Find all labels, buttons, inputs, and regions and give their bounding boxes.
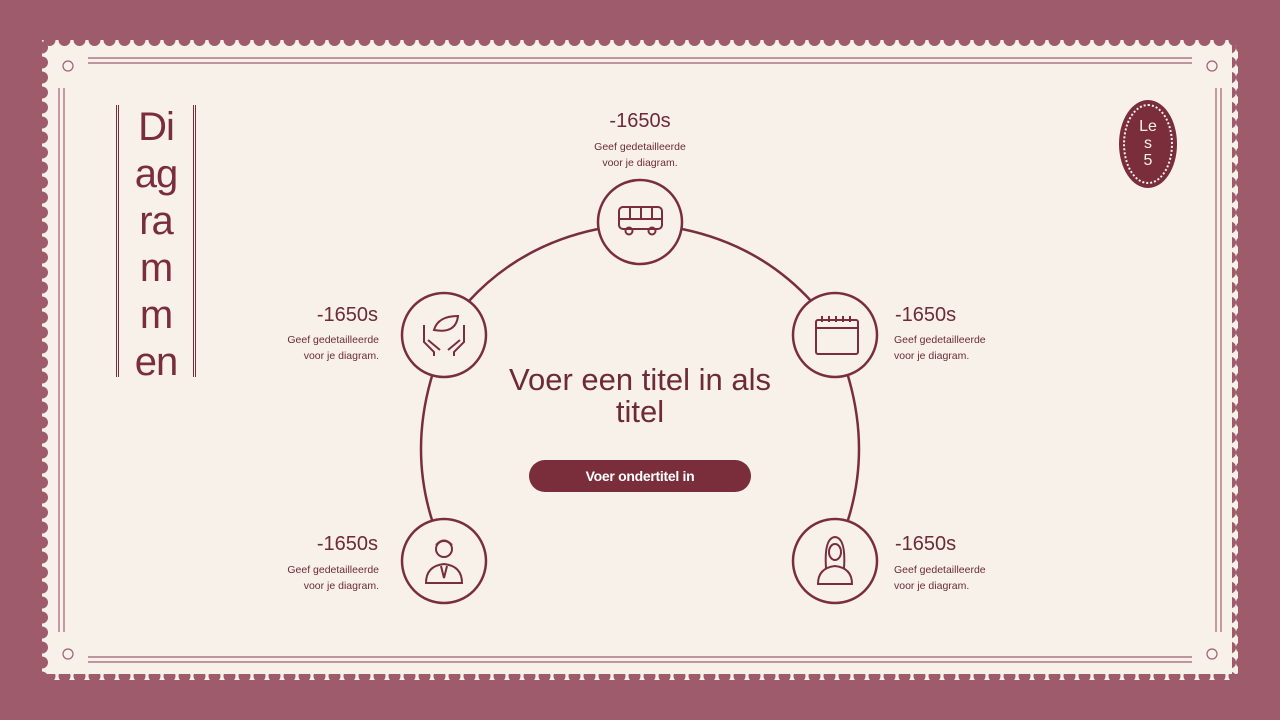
title: Diagrammen vertical <box>116 105 196 377</box>
text: voor je diagram. <box>304 580 379 592</box>
title: Diagrammen vertical: en <box>135 340 177 384</box>
text: top item: -1650s <box>609 110 671 132</box>
text: voor je diagram. <box>304 350 379 362</box>
main title: Voer een titel in als titel <box>509 362 771 429</box>
text: Geef gedetailleerde <box>287 334 379 346</box>
title: Diagrammen vertical: ra <box>139 199 173 243</box>
badge: Les 5: s <box>1144 135 1152 152</box>
subtitle pill <box>529 460 751 492</box>
text: voor je diagram. <box>894 350 969 362</box>
badge: Les 5: Le <box>1139 118 1157 135</box>
icon: woman <box>818 537 852 584</box>
icon: bus <box>619 207 662 234</box>
icon: hands leaf <box>424 316 464 356</box>
icon: man <box>426 540 462 583</box>
title: Diagrammen vertical: m <box>140 293 172 337</box>
text: left lower item: -1650s <box>317 533 378 555</box>
text: right upper item: -1650s <box>895 304 956 326</box>
text: Geef gedetailleerde <box>894 334 986 346</box>
title: Diagrammen vertical: m <box>140 246 172 290</box>
icon: calendar <box>816 316 858 354</box>
text: voor je diagram. <box>894 580 969 592</box>
subtitle pill: Voer ondertitel in <box>586 468 694 484</box>
text: right lower item: -1650s <box>895 533 956 555</box>
text: left upper item: -1650s <box>317 304 378 326</box>
badge: Les 5 <box>1119 100 1177 188</box>
text: Geef gedetailleerde <box>594 141 686 153</box>
text: voor je diagram. <box>602 157 678 169</box>
title: Diagrammen vertical: Di <box>138 105 174 149</box>
title: Diagrammen vertical: ag <box>135 152 177 196</box>
text: Geef gedetailleerde <box>894 564 986 576</box>
badge: Les 5: 5 <box>1144 152 1152 169</box>
text: Geef gedetailleerde <box>287 564 379 576</box>
